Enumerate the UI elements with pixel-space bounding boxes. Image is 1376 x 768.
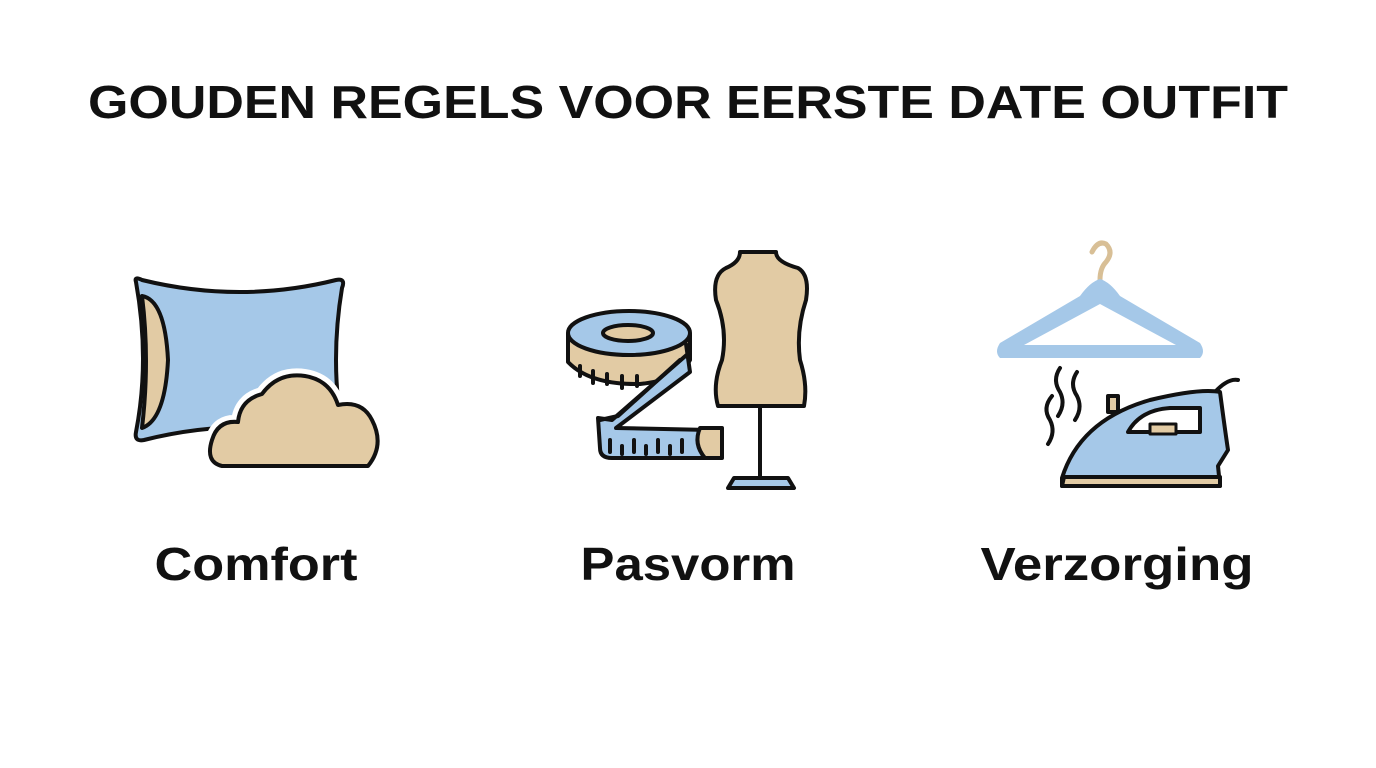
title: GOUDEN REGELS VOOR EERSTE DATE OUTFIT: [88, 76, 1288, 128]
icon: measuring tape and mannequin: [568, 252, 807, 488]
icon: hanger and iron: [997, 243, 1238, 486]
label: Verzorging: Verzorging: [980, 538, 1254, 590]
icon: pillow and cloud: [136, 278, 378, 466]
label: Comfort: Comfort: [154, 538, 358, 590]
label: Pasvorm: Pasvorm: [580, 538, 796, 590]
